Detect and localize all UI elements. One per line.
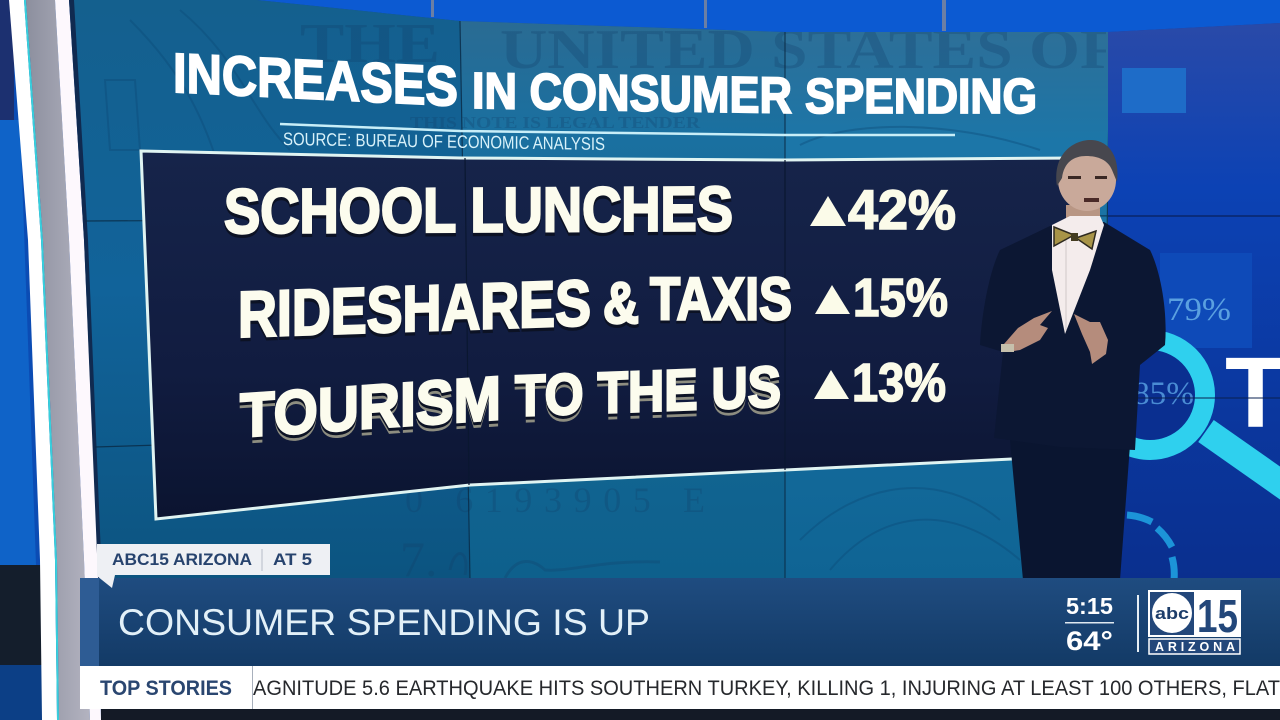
location tag: ABC15 ARIZONA <box>112 550 252 569</box>
dollar bill print texture: 0 6193905 E <box>405 480 705 520</box>
row: tourism to the us: TOURISM <box>240 364 501 451</box>
wall seams <box>85 21 1280 580</box>
upper wall blue band <box>257 0 1280 32</box>
ticker divider <box>252 666 254 709</box>
row: school lunches: 42% <box>848 178 956 241</box>
eyes and mouth <box>1068 176 1107 202</box>
title: INCREASES <box>173 41 458 118</box>
neck <box>1066 205 1100 230</box>
left studio edge <box>0 0 105 720</box>
right wall graphics: 85% <box>1133 376 1194 412</box>
upper band seams <box>431 0 946 31</box>
row: tourism to the us <box>240 353 946 457</box>
row: tourism to the us: TOURISM <box>240 367 501 454</box>
dollar bill wall: left section <box>74 0 470 580</box>
data panel <box>141 151 1075 519</box>
hair <box>1056 140 1118 186</box>
dollar bill wall: middle section <box>460 21 785 580</box>
bottom floor strip <box>101 709 1280 720</box>
logo: abc15 arizona: ARIZONA <box>1155 640 1235 654</box>
dollar bill print texture: THE <box>300 13 440 75</box>
panel seam <box>465 158 785 485</box>
row: rideshares and taxis: & <box>603 271 639 336</box>
ticker bar <box>80 666 1280 709</box>
row: tourism to the us: 13% <box>852 353 946 413</box>
title: SPENDING <box>805 70 1037 124</box>
head <box>1058 149 1116 211</box>
dollar bill print texture: THIS NOTE IS LEGAL TENDER <box>410 113 701 132</box>
logo: abc15 arizona: abc <box>1155 604 1189 623</box>
title: IN CONSUMER <box>472 62 792 124</box>
headline: CONSUMER SPENDING IS UP <box>118 602 650 643</box>
source line: SOURCE: BUREAU OF ECONOMIC ANALYSIS <box>283 129 605 154</box>
shirt placket <box>1065 240 1067 330</box>
ticker label: TOP STORIES <box>100 677 232 700</box>
time and temperature: 5:15 <box>1066 593 1113 619</box>
watch <box>1001 344 1014 352</box>
shirt <box>1052 216 1104 334</box>
presenter <box>980 140 1166 580</box>
row: rideshares and taxis: & <box>603 274 639 339</box>
row: rideshares and taxis: RIDESHARES <box>238 269 591 354</box>
row: school lunches: SCHOOL LUNCHES <box>224 174 733 247</box>
trousers <box>1010 440 1130 580</box>
location tag <box>97 544 330 588</box>
right hand <box>1074 314 1108 364</box>
dollar bill print texture: 7. <box>400 531 438 587</box>
row: rideshares and taxis: TAXIS <box>650 268 792 335</box>
time and temperature <box>1065 593 1114 656</box>
row: tourism to the us: TOURISM <box>240 370 501 457</box>
right wall graphics: 79% <box>1167 292 1231 328</box>
title rule <box>280 124 955 135</box>
banner left lip <box>80 578 99 666</box>
dollar bill print texture <box>300 13 1120 587</box>
row: rideshares and taxis: TAXIS <box>650 266 792 332</box>
dollar bill print texture: UNITED STATES OF <box>500 19 1120 81</box>
row: rideshares and taxis: 15% <box>853 268 948 328</box>
row: tourism to the us: TO THE US <box>515 354 781 429</box>
bow tie <box>1054 227 1096 249</box>
row: tourism to the us: TO THE US <box>515 357 781 432</box>
time and temperature: 64° <box>1066 626 1113 656</box>
row: rideshares and taxis <box>238 266 948 354</box>
jacket <box>980 222 1166 450</box>
row: school lunches: SCHOOL LUNCHES <box>224 177 733 250</box>
row: tourism to the us: TO THE US <box>515 360 781 435</box>
decorative bill engraving <box>105 10 1040 570</box>
right wall graphics <box>1095 20 1280 580</box>
logo: abc15 arizona: 15 <box>1197 590 1238 642</box>
divider <box>1137 595 1139 652</box>
lower third banner <box>80 578 1280 666</box>
row: rideshares and taxis: RIDESHARES <box>238 266 591 351</box>
title <box>173 41 1037 124</box>
left hand <box>1004 311 1052 352</box>
logo: abc15 arizona <box>1148 590 1241 654</box>
dollar bill wall: right section <box>785 32 1108 580</box>
location tag: AT 5 <box>273 550 312 569</box>
